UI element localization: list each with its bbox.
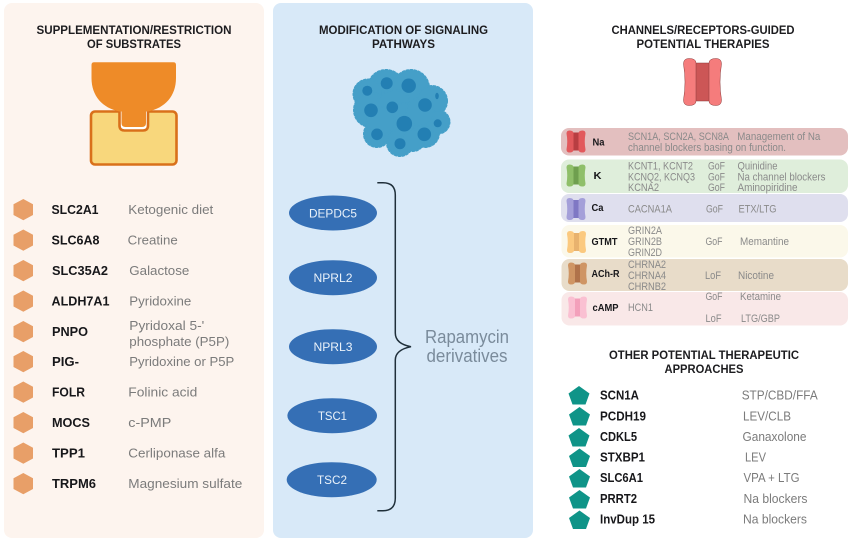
oval: TSC1 bbox=[287, 398, 377, 433]
oval: NPRL3 bbox=[289, 329, 377, 364]
list: TPP1: Cerliponase alfa bbox=[128, 446, 225, 460]
item: InvDup 15: InvDup 15 bbox=[600, 512, 655, 526]
item: CDKL5: Ganaxolone bbox=[742, 430, 806, 444]
row: ACh-R: CHRNB2 bbox=[628, 281, 666, 293]
heading: supplementation: OF SUBSTRATES bbox=[87, 37, 181, 51]
row: K: KCNA2 bbox=[628, 182, 659, 194]
row: GTMT: GRIN2A bbox=[628, 225, 663, 237]
list: PIG- bbox=[14, 351, 234, 372]
heading: channels/receptors: CHANNELS/RECEPTORS-GUIDED bbox=[612, 23, 795, 37]
row: cAMP: Ketamine bbox=[740, 291, 781, 303]
list: SLC35A2: Galactose bbox=[129, 264, 189, 278]
row: Ca: ETX/LTG bbox=[738, 204, 776, 216]
item: SCN1A: STP/CBD/FFA bbox=[742, 388, 818, 402]
heading: supplementation bbox=[36, 23, 232, 51]
row: ACh-R: LoF bbox=[705, 270, 721, 282]
row: Ca: GoF bbox=[706, 204, 723, 216]
list: PNPO: PNPO bbox=[52, 325, 88, 339]
list: SLC2A1: SLC2A1 bbox=[52, 203, 98, 217]
item: SLC6A1: SLC6A1 bbox=[600, 471, 643, 485]
list: MOCS: MOCS bbox=[52, 416, 90, 430]
list: TRPM6 bbox=[14, 473, 242, 494]
item: SCN1A bbox=[568, 386, 818, 404]
list: FOLR: FOLR bbox=[52, 386, 85, 400]
list: FOLR bbox=[14, 382, 197, 403]
list: SLC6A8: SLC6A8 bbox=[52, 234, 100, 248]
list: MOCS bbox=[14, 412, 171, 433]
row: Na bbox=[561, 128, 848, 156]
heading: supplementation: SUPPLEMENTATION/RESTRICTION bbox=[36, 23, 232, 37]
icon: ACh-R channel bbox=[568, 262, 587, 284]
icon: Na channel bbox=[566, 130, 586, 152]
row: K: KCNQ2, KCNQ3 bbox=[628, 172, 695, 184]
row: cAMP: cAMP bbox=[592, 302, 618, 314]
row: K: GoF bbox=[708, 182, 725, 194]
list: SLC2A1 bbox=[14, 199, 214, 220]
text: rapamycin derivatives bbox=[425, 327, 509, 366]
row: ACh-R: CHRNA2 bbox=[628, 259, 666, 271]
item: PRRT2: Na blockers bbox=[744, 492, 808, 506]
list: FOLR: Folinic acid bbox=[128, 386, 197, 400]
row: cAMP: LTG/GBP bbox=[741, 313, 780, 325]
row: ACh-R bbox=[562, 259, 848, 293]
item: SCN1A: SCN1A bbox=[600, 388, 639, 402]
heading: other potential therapeutic approaches: APPROACHES bbox=[664, 362, 744, 376]
row: K: Aminopiridine bbox=[738, 182, 798, 194]
row: Na: Na bbox=[592, 136, 605, 148]
list: PIG-: Pyridoxine or P5P bbox=[129, 355, 234, 369]
item: STXBP1: LEV bbox=[745, 450, 767, 464]
list: PNPO: Pyridoxal 5-' bbox=[129, 319, 204, 333]
row: cAMP: LoF bbox=[706, 313, 722, 325]
list: SLC6A8: Creatine bbox=[128, 234, 178, 248]
oval: DEPDC5: DEPDC5 bbox=[309, 206, 357, 220]
oval: NPRL2 bbox=[289, 260, 377, 295]
icon: channel large bbox=[684, 58, 722, 106]
row: GTMT bbox=[562, 225, 848, 259]
row: GTMT: GRIN2B bbox=[628, 236, 662, 248]
oval: NPRL2: NPRL2 bbox=[314, 271, 353, 285]
brace bbox=[377, 183, 411, 511]
list: MOCS: c-PMP bbox=[128, 416, 171, 430]
list: SLC35A2 bbox=[14, 260, 189, 281]
row: Na: channel blockers basing on function. bbox=[628, 142, 786, 154]
item: STXBP1: STXBP1 bbox=[600, 450, 645, 464]
item: InvDup 15: Na blockers bbox=[743, 512, 807, 526]
row: Ca: Ca bbox=[592, 202, 604, 214]
list: PNPO: phosphate (P5P) bbox=[129, 335, 229, 349]
row: Ca: CACNA1A bbox=[628, 204, 673, 216]
row: ACh-R: Nicotine bbox=[738, 270, 774, 282]
row: K: GoF bbox=[708, 172, 725, 184]
list: PNPO bbox=[14, 319, 229, 349]
icon: cell cluster bbox=[354, 70, 450, 156]
row: GTMT: GoF bbox=[706, 236, 723, 248]
list: TRPM6: TRPM6 bbox=[52, 477, 96, 491]
row: K: K bbox=[594, 170, 602, 182]
icon: K channel bbox=[566, 164, 586, 186]
row: K: Quinidine bbox=[738, 160, 778, 172]
item: STXBP1 bbox=[569, 448, 767, 467]
icon: cAMP channel bbox=[568, 296, 587, 318]
item: PRRT2: PRRT2 bbox=[600, 492, 637, 506]
row: GTMT: GTMT bbox=[592, 236, 618, 248]
text: rapamycin derivatives: derivatives bbox=[426, 346, 508, 366]
heading: signaling bbox=[319, 23, 488, 51]
item: PCDH19 bbox=[569, 407, 791, 426]
list: ALDH7A1 bbox=[14, 290, 191, 312]
oval: DEPDC5 bbox=[289, 196, 377, 230]
list: TRPM6: Magnesium sulfate bbox=[128, 477, 242, 491]
item: PCDH19: PCDH19 bbox=[600, 410, 646, 424]
panel: supplementation/restriction of substrates bbox=[4, 3, 264, 538]
item: CDKL5: CDKL5 bbox=[600, 430, 637, 444]
text: rapamycin derivatives: Rapamycin bbox=[425, 327, 509, 347]
list: TPP1 bbox=[14, 442, 225, 464]
list: TPP1: TPP1 bbox=[52, 446, 85, 460]
row: GTMT: Memantine bbox=[740, 236, 789, 248]
heading: signaling: MODIFICATION OF SIGNALING bbox=[319, 23, 488, 37]
item: CDKL5 bbox=[568, 428, 806, 446]
list: SLC35A2: SLC35A2 bbox=[52, 264, 108, 278]
row: cAMP bbox=[562, 291, 848, 326]
heading: channels/receptors bbox=[612, 23, 795, 51]
row: ACh-R: ACh-R bbox=[592, 268, 620, 280]
oval: TSC2: TSC2 bbox=[317, 473, 347, 487]
panel: modification of signaling pathways bbox=[273, 3, 533, 538]
row: cAMP: GoF bbox=[706, 291, 723, 303]
icon: GTMT channel bbox=[567, 231, 586, 253]
icon: Ca channel bbox=[566, 198, 586, 220]
heading: other potential therapeutic approaches: OTHER POTENTIAL THERAPEUTIC bbox=[609, 348, 799, 362]
row: Na: SCN1A, SCN2A, SCN8A bbox=[628, 131, 730, 143]
heading: other potential therapeutic approaches bbox=[609, 348, 799, 376]
row: K: GoF bbox=[708, 160, 725, 172]
row: K bbox=[561, 160, 848, 194]
row: K: Na channel blockers bbox=[738, 172, 826, 184]
oval: TSC2 bbox=[287, 462, 377, 497]
list: ALDH7A1: Pyridoxine bbox=[129, 294, 191, 308]
row: GTMT: GRIN2D bbox=[628, 247, 662, 259]
item: PRRT2 bbox=[569, 490, 808, 508]
oval: TSC1: TSC1 bbox=[318, 409, 347, 423]
list: ALDH7A1: ALDH7A1 bbox=[52, 294, 110, 308]
icon: enzyme and substrate bbox=[91, 62, 176, 164]
item: SLC6A1 bbox=[569, 469, 800, 488]
row: Na: Management of Na bbox=[737, 131, 820, 143]
heading: channels/receptors: POTENTIAL THERAPIES bbox=[636, 37, 770, 51]
list: SLC6A8 bbox=[14, 230, 178, 251]
item: SLC6A1: VPA + LTG bbox=[744, 471, 800, 485]
list: PIG-: PIG- bbox=[52, 355, 79, 369]
row: cAMP: HCN1 bbox=[628, 302, 653, 314]
row: Ca bbox=[561, 194, 848, 222]
oval: NPRL3: NPRL3 bbox=[314, 340, 353, 354]
item: InvDup 15 bbox=[569, 510, 807, 529]
row: K: KCNT1, KCNT2 bbox=[628, 160, 693, 172]
list: SLC2A1: Ketogenic diet bbox=[128, 203, 214, 217]
row: ACh-R: CHRNA4 bbox=[628, 270, 666, 282]
item: PCDH19: LEV/CLB bbox=[743, 410, 791, 424]
heading: signaling: PATHWAYS bbox=[372, 37, 435, 51]
